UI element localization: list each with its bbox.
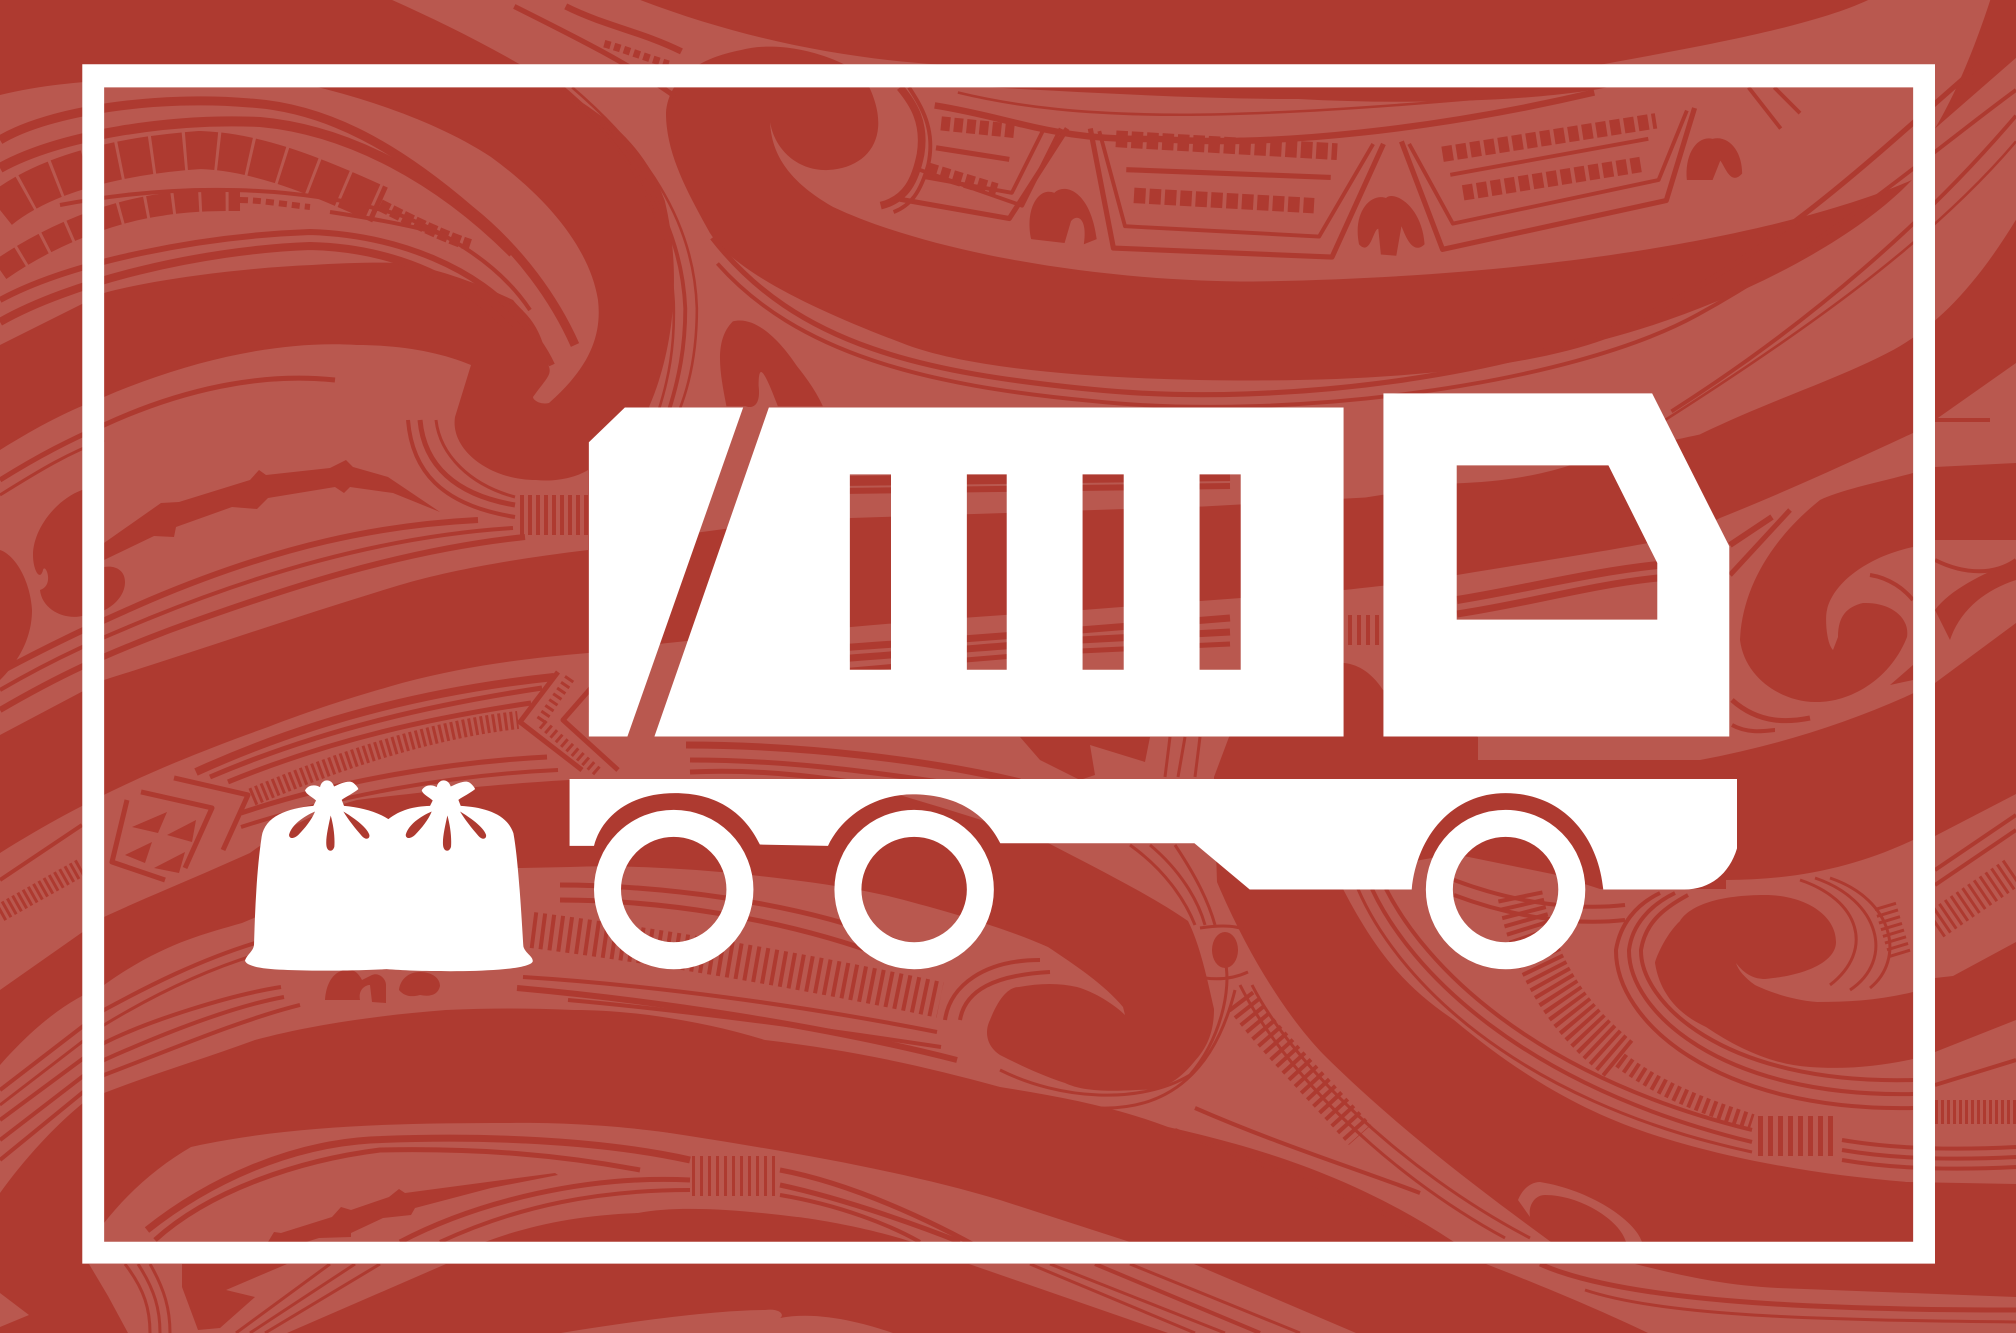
truck: rear wheel: [608, 823, 740, 956]
icon: two rubbish bags: [245, 780, 533, 971]
decorative panel 3: [1401, 108, 1695, 249]
pattern: central band behind truck joining right swirl: [0, 363, 2016, 990]
pattern: strips below frame: [0, 1264, 2016, 1333]
truck: rear door: [589, 407, 743, 737]
pattern: top crescent and arc: [392, 0, 2016, 540]
truck: middle wheel: [848, 823, 980, 956]
truck: chassis: [570, 779, 1737, 890]
decorative panel 2: [1090, 129, 1383, 257]
truck: cab with window: [1383, 393, 1729, 737]
pattern: lower band with knot and spike: [104, 1123, 1130, 1260]
truck: container with four slots: [654, 407, 1344, 737]
decorative panel 1: [900, 123, 1067, 219]
right swirl: [1740, 473, 1913, 702]
diamond carving: [112, 778, 248, 880]
stripes seen through slots: [840, 476, 1230, 481]
pattern: lower right swirl: [1343, 794, 2016, 1242]
pattern: bottom feather with chevrons and swirl: [0, 785, 1551, 1242]
icon: rubbish truck: [570, 393, 1737, 956]
pattern: top-left feather: [0, 77, 599, 403]
truck: front wheel: [1439, 823, 1572, 956]
pattern: left band with spike: [0, 344, 588, 735]
carved motifs: [1030, 87, 1800, 256]
